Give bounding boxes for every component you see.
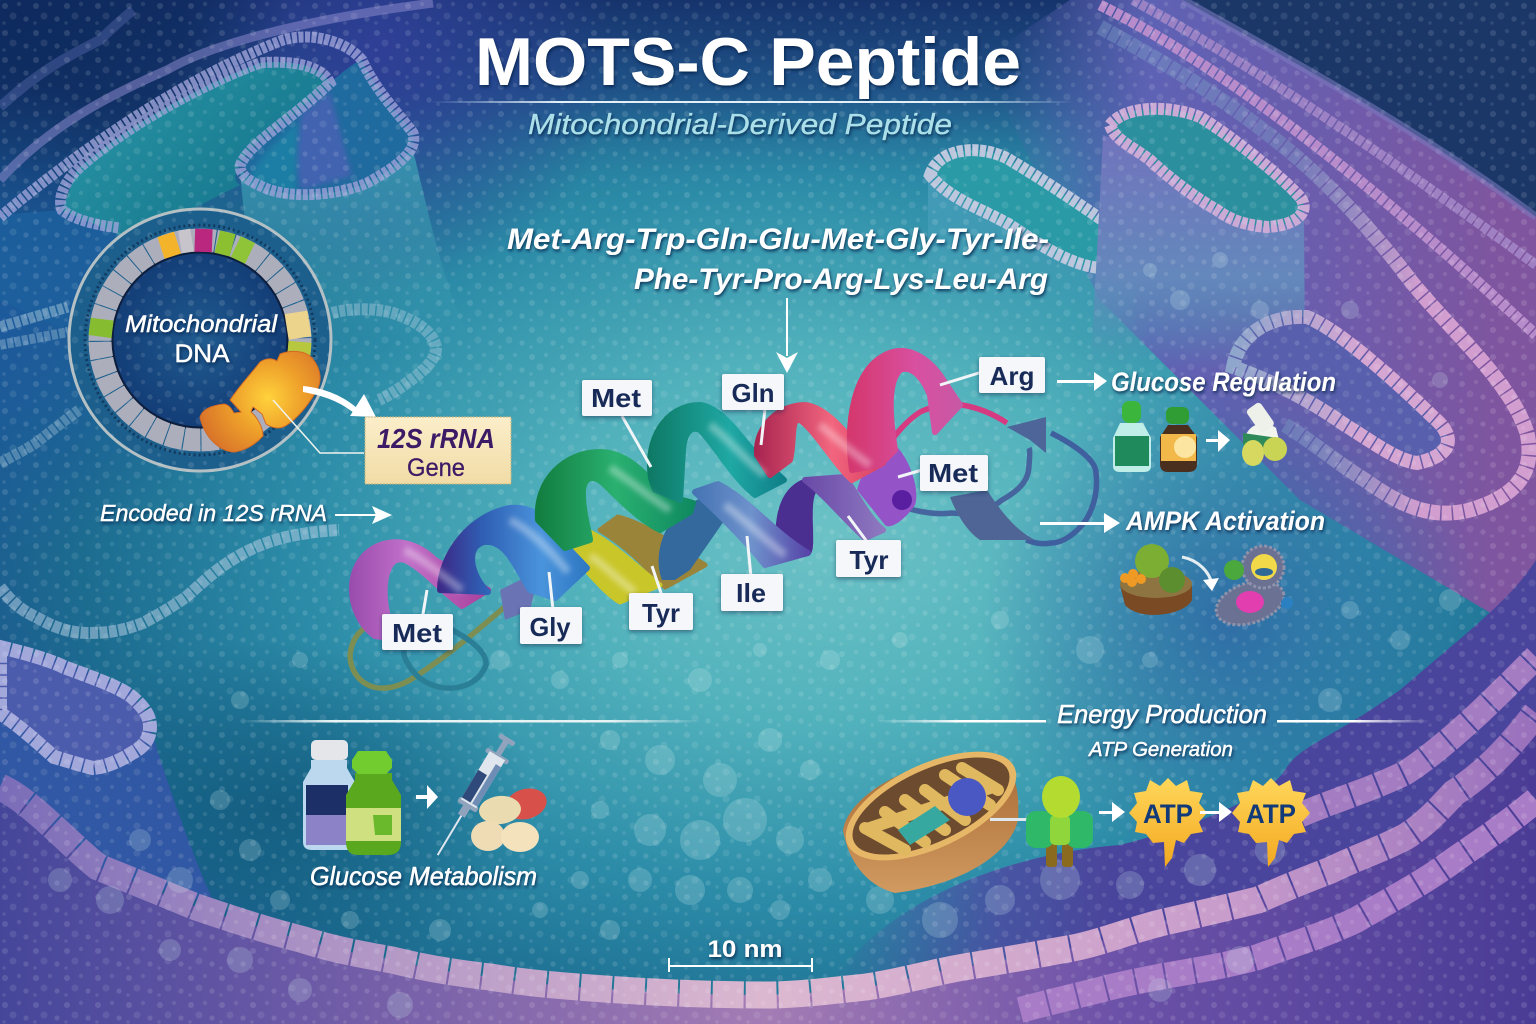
right purple matrix region	[980, 0, 1536, 640]
fold: right loop	[1233, 317, 1448, 463]
label: Mitochondrial DNA: Mitochondrial	[125, 311, 278, 338]
label: Met upper	[582, 380, 652, 416]
back strands	[500, 570, 540, 620]
bands: outer membrane upper left	[0, 3, 433, 180]
heading: Glucose Metabolism: Glucose Metabolism	[310, 861, 537, 891]
label: Met middle: Met	[928, 458, 978, 488]
icon: amber bottle	[1160, 407, 1197, 472]
labels: amino acid residues	[382, 357, 1045, 650]
connector: mitochondrion to synthase	[990, 818, 1028, 821]
heading: Glucose Regulation: Glucose Regulation	[1111, 367, 1336, 397]
subtitle: Mitochondrial-Derived Peptide	[528, 109, 952, 141]
cristae folds	[0, 0, 1536, 633]
fold: upper centre	[928, 150, 1135, 340]
icon group: AMPK pathway	[1120, 544, 1293, 633]
amino acid sequence	[507, 223, 1049, 296]
label: Met N-terminal: Met	[392, 618, 442, 648]
lower left fold	[0, 647, 215, 905]
panel: energy production icons	[830, 729, 1310, 893]
icon: teal bottle	[1113, 401, 1151, 472]
arrow: between ATP	[1200, 802, 1232, 822]
arrow: to syringe	[416, 785, 438, 809]
divider: glucose metabolism	[240, 720, 700, 722]
bands: right outer membranes	[1100, 0, 1536, 513]
connector lines to labels	[422, 372, 982, 620]
highlights	[405, 425, 870, 592]
arrowhead: loop	[1007, 417, 1046, 453]
label: Tyr lower	[629, 593, 693, 630]
callout: 12S rRNA Gene: Gene	[407, 454, 465, 482]
icon: organelle complex	[1211, 546, 1293, 633]
label: Met N-terminal	[382, 614, 453, 650]
label: Gly: Gly	[530, 612, 571, 642]
title rule	[430, 101, 1075, 103]
scale bar: 10 nm	[669, 936, 812, 972]
bokeh vesicles	[48, 252, 1461, 1018]
icon group: bottles and pills	[1113, 401, 1287, 472]
label: Arg	[979, 357, 1045, 393]
divider: energy production right	[1277, 720, 1430, 722]
callout: 12S rRNA Gene	[365, 417, 511, 484]
arrow: curved	[1182, 557, 1219, 591]
fold: pale rims left and centre	[0, 307, 436, 463]
fold: upper right	[1090, 109, 1305, 370]
divider: energy production left	[875, 720, 1046, 722]
peptide helix ribbon	[350, 351, 1097, 688]
label: Ile: Ile	[736, 578, 766, 608]
icon: mitochondrion cross-section	[830, 729, 1032, 893]
icon: tissue block	[1120, 544, 1192, 615]
icon: ATP burst	[1129, 778, 1207, 867]
panel: glucose metabolism	[303, 731, 550, 891]
icon: ATP burst	[1232, 778, 1310, 867]
label: Tyr lower: Tyr	[642, 598, 680, 628]
label: Arg: Arg	[990, 361, 1034, 391]
scale bar: 10 nm: 10 nm	[708, 936, 782, 963]
icon: ATP burst: ATP	[1246, 799, 1296, 829]
arrow: to pills	[1206, 430, 1230, 452]
arrow: encoded	[335, 506, 392, 524]
label: Ile	[721, 574, 783, 611]
fold: upper left	[0, 37, 470, 360]
label: Met upper: Met	[591, 383, 641, 413]
arrow: to AMPK Activation	[1040, 513, 1120, 533]
label: Gly	[520, 607, 582, 644]
loop tubes	[350, 404, 1097, 688]
arrow: to ATP	[1099, 802, 1125, 822]
icon: pills	[471, 784, 550, 852]
label: Gln	[722, 374, 784, 410]
bottom membrane bands	[0, 657, 1536, 1024]
icon: pills	[1242, 401, 1287, 466]
label: Met middle	[920, 455, 988, 491]
arrow: to Glucose Regulation	[1057, 372, 1107, 391]
arrow: sequence to helix	[776, 298, 798, 373]
amino acid sequence: Phe-Tyr-Pro-Arg-Lys-Leu-Arg	[634, 263, 1048, 296]
callout: 12S rRNA Gene: 12S rRNA	[377, 423, 495, 454]
gene ring segments	[100, 240, 300, 440]
navy corner upper right	[1183, 0, 1536, 217]
heading: AMPK Activation: AMPK Activation	[1125, 506, 1325, 536]
label: Mitochondrial DNA	[125, 311, 278, 368]
icon: ATP burst: ATP	[1143, 799, 1193, 829]
amino acid sequence: Met-Arg-Trp-Gln-Glu-Met-Gly-Tyr-Ile-	[507, 223, 1049, 256]
label: Tyr upper: Tyr	[850, 545, 888, 575]
title: MOTS-C Peptide	[475, 24, 1021, 100]
arrow: curved to gene label	[303, 386, 376, 417]
icon: glass vial	[303, 740, 355, 850]
blue haze under right fold	[980, 370, 1480, 870]
icon: syringe	[427, 731, 519, 862]
front coils	[352, 542, 488, 640]
subheading: ATP Generation: ATP Generation	[1088, 739, 1233, 761]
icon: green bottle	[346, 751, 401, 855]
icon: ATP synthase	[1026, 776, 1093, 867]
text: Encoded in 12S rRNA: Encoded in 12S rRNA	[100, 500, 327, 526]
lower right purple region	[830, 560, 1536, 990]
label: Tyr upper	[836, 540, 901, 577]
icon: mitochondrion	[200, 351, 320, 452]
panel: mitochondrial DNA	[69, 209, 331, 471]
connector: mitochondrion to gene label	[273, 400, 364, 453]
heading: Energy Production: Energy Production	[1057, 699, 1267, 729]
inner membrane curve	[0, 530, 339, 633]
label: Mitochondrial DNA: DNA	[174, 340, 230, 368]
label: Gln: Gln	[732, 378, 774, 408]
